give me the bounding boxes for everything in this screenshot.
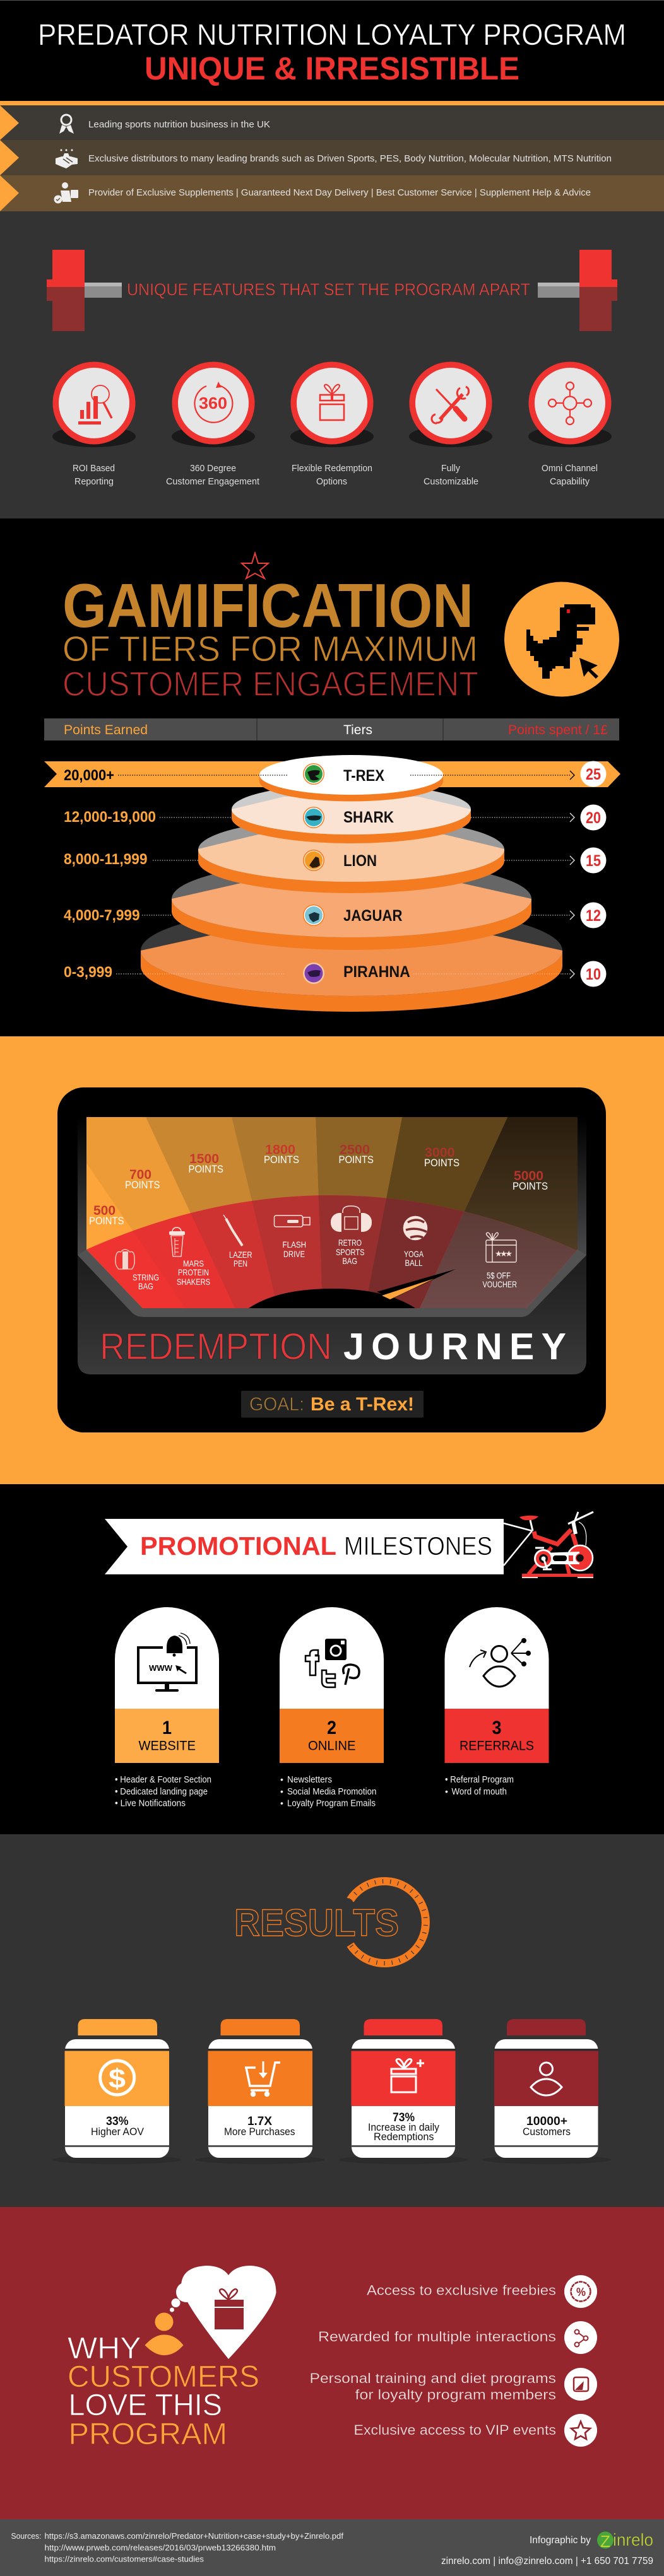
redemption: 5000 points voucher: ★★★ bbox=[495, 1249, 513, 1258]
credit and logo: zinrelo.com | info@zinrelo.com | +1 650 701 7759 bbox=[441, 2556, 653, 2567]
bottle: higher AOV bbox=[52, 2019, 181, 2164]
tier row: pirahna: PIRAHNA bbox=[343, 963, 410, 981]
redemption: 700 points shakers: SHAKERS bbox=[177, 1277, 210, 1287]
redemption: 3000 points yoga ball: POINTS bbox=[424, 1157, 459, 1169]
tier row: jaguar: JAGUAR bbox=[343, 907, 403, 925]
redemption: 5000 points voucher: 5$ OFF bbox=[487, 1270, 511, 1280]
credit and logo: inrelo bbox=[613, 2530, 653, 2550]
banner bbox=[105, 1519, 504, 1574]
text: exclusive supplements: Provider of Exclusive Supplements | Guaranteed Next Day Delivery | Best Customer Service | Supplement Help & Advice bbox=[88, 188, 591, 198]
redemption: 500 points string bag: 500 bbox=[93, 1203, 116, 1218]
redemption: 1800 points flash drive: DRIVE bbox=[283, 1249, 305, 1259]
tier row: t-rex bbox=[64, 761, 606, 787]
redemption: 700 points shakers bbox=[125, 1168, 210, 1287]
bottle: customers bbox=[482, 2019, 611, 2164]
title: PREDATOR NUTRITION LOYALTY PROGRAM bbox=[38, 18, 626, 51]
redemption: 500 points string bag: BAG bbox=[138, 1281, 153, 1291]
goal box: Be a T-Rex! bbox=[311, 1394, 414, 1415]
card: website bbox=[115, 1607, 219, 1809]
icon: gift plus bbox=[391, 2059, 424, 2092]
redemption: 3000 points yoga ball: YOGA bbox=[404, 1249, 424, 1259]
benefit: personal training: Personal training and diet programs bbox=[309, 2370, 556, 2386]
feature: fully customizable: Fully bbox=[441, 463, 460, 474]
redemption: 2500 points sports bag: RETRO bbox=[338, 1238, 362, 1248]
icon: dinosaur badge bbox=[504, 582, 619, 696]
panel: why customers love this program bbox=[0, 2207, 664, 2519]
panel: results bbox=[0, 1834, 664, 2207]
card: website: 1 bbox=[162, 1718, 172, 1738]
redemption: 3000 points yoga ball: 3000 bbox=[425, 1145, 454, 1160]
icon: heart with gift and person bbox=[145, 2266, 276, 2359]
tier row: jaguar bbox=[64, 902, 606, 928]
panel: gamification bbox=[44, 551, 620, 1012]
card: online bbox=[280, 1607, 384, 1809]
redemption: 700 points shakers: 700 bbox=[129, 1168, 151, 1182]
gauge bezel bbox=[78, 1117, 586, 1374]
feature: flexible redemption: Flexible Redemption bbox=[292, 463, 372, 474]
tier disk: shark bbox=[232, 791, 471, 843]
panel: promotional milestones bbox=[0, 1484, 664, 1834]
feature: fully customizable bbox=[409, 362, 492, 487]
card: online: Social Media Promotion bbox=[287, 1787, 376, 1797]
sources: Sources: bbox=[11, 2531, 42, 2541]
feature: ROI based reporting: Reporting bbox=[74, 476, 114, 487]
heading: why customers love this program: WHY bbox=[68, 2332, 141, 2365]
panel: header bbox=[0, 0, 664, 105]
redemption: 1800 points flash drive: POINTS bbox=[264, 1154, 299, 1166]
benefit: multiple interactions: Rewarded for multiple interactions bbox=[318, 2329, 556, 2345]
panel: redemption journey bbox=[0, 1036, 664, 1484]
benefit: exclusive freebies bbox=[367, 2275, 597, 2308]
tier row: t-rex: T-REX bbox=[343, 767, 384, 785]
redemption: 5000 points voucher: VOUCHER bbox=[482, 1279, 517, 1289]
benefit: VIP events bbox=[353, 2414, 597, 2447]
redemption: 2500 points sports bag bbox=[331, 1143, 374, 1266]
redemption: 1800 points flash drive: FLASH bbox=[283, 1239, 306, 1250]
tier row: lion: 8,000-11,999 bbox=[64, 851, 148, 868]
tier row: pirahna: 10 bbox=[586, 966, 601, 983]
heading: unique features: UNIQUE FEATURES THAT SET THE PROGRAM APART bbox=[127, 280, 530, 299]
sources: https://zinrelo.com/customers#case-studies bbox=[44, 2555, 204, 2563]
tier row: pirahna bbox=[64, 961, 606, 986]
bottle: higher AOV: 33% bbox=[106, 2115, 129, 2128]
tier disk: lion bbox=[198, 828, 504, 893]
feature: 360 degree engagement: 360 Degree bbox=[190, 463, 236, 474]
card: online: • bbox=[280, 1774, 283, 1784]
heading: results: RESULTS bbox=[234, 1902, 399, 1944]
tier row: jaguar: 12 bbox=[586, 907, 601, 925]
panel: footer bbox=[0, 2519, 664, 2576]
text: leading business: Leading sports nutrition business in the UK bbox=[88, 120, 270, 130]
card: website: WEBSITE bbox=[139, 1738, 196, 1753]
bottle: daily redemptions bbox=[339, 2019, 468, 2164]
icon: referral person bbox=[470, 1639, 530, 1687]
banner: MILESTONES bbox=[344, 1531, 492, 1560]
card: referrals: • Referral Program bbox=[445, 1775, 514, 1785]
feature: 360 degree engagement: Customer Engagement bbox=[166, 476, 260, 487]
bottle: daily redemptions: 73% bbox=[393, 2111, 415, 2124]
heading: customer engagement: CUSTOMER ENGAGEMENT bbox=[62, 664, 478, 703]
redemption: 3000 points yoga ball bbox=[403, 1145, 459, 1268]
benefit: exclusive freebies: % bbox=[576, 2286, 586, 2298]
bottle: more purchases: 1.7X bbox=[247, 2115, 272, 2128]
tier table header: Points Earned bbox=[64, 723, 148, 737]
icon: handshake bbox=[56, 149, 78, 168]
feature: flexible redemption: Options bbox=[316, 476, 347, 487]
sources bbox=[11, 2531, 343, 2563]
top tier banner bbox=[44, 761, 620, 787]
icon: ribbon bbox=[59, 114, 74, 134]
icon: exercise bike bbox=[504, 1512, 593, 1578]
panel: unique features bbox=[0, 211, 664, 518]
card: online: Newsletters bbox=[287, 1775, 332, 1785]
tier table header bbox=[44, 718, 619, 741]
feature: omni channel: Omni Channel bbox=[542, 463, 598, 474]
bottle: more purchases: More Purchases bbox=[224, 2126, 295, 2138]
heading: results bbox=[234, 1881, 425, 1964]
redemption: 2500 points sports bag: BAG bbox=[342, 1256, 357, 1266]
tier row: t-rex: 25 bbox=[586, 766, 601, 783]
feature: omni channel: Capability bbox=[550, 476, 590, 487]
redemption: 1800 points flash drive bbox=[264, 1143, 310, 1259]
text: exclusive distributors: Exclusive distributors to many leading brands such as Driven Sports, PES, Body Nutrition, Molecular Nutrition, MTS Nutrition bbox=[88, 154, 612, 164]
heading: redemption journey: REDEMPTION bbox=[100, 1326, 332, 1367]
dotted guide lines bbox=[116, 775, 571, 974]
benefit: exclusive freebies: Access to exclusive freebies bbox=[367, 2282, 556, 2298]
benefit: personal training: for loyalty program members bbox=[355, 2387, 556, 2403]
icon: shopping cart bbox=[245, 2061, 280, 2095]
gauge dial bbox=[86, 1117, 578, 1308]
heading: redemption journey: JOURNEY bbox=[343, 1326, 566, 1367]
heading: gamification: GAMIFICATION bbox=[62, 571, 473, 640]
icon: star bbox=[242, 553, 268, 578]
tier row: lion bbox=[64, 848, 606, 873]
feature: ROI based reporting: ROI Based bbox=[73, 463, 115, 474]
panel: company facts bbox=[0, 105, 664, 211]
icon: delivery person bbox=[54, 182, 78, 203]
card: online: • bbox=[280, 1786, 283, 1796]
bottle: customers: 10000+ bbox=[526, 2115, 567, 2128]
redemption: 5000 points voucher: POINTS bbox=[513, 1181, 548, 1192]
redemption: 2500 points sports bag: SPORTS bbox=[336, 1247, 365, 1257]
tier row: jaguar: 4,000-7,999 bbox=[64, 907, 140, 924]
redemption: 5000 points voucher bbox=[482, 1169, 548, 1289]
feature: 360 degree engagement bbox=[166, 362, 260, 487]
tier row: lion: 15 bbox=[586, 852, 601, 870]
redemption: 5000 points voucher: 5000 bbox=[514, 1169, 543, 1183]
bottle: more purchases bbox=[196, 2019, 324, 2164]
feature: flexible redemption bbox=[290, 362, 374, 487]
tier row: shark: SHARK bbox=[343, 809, 394, 826]
subtitle: UNIQUE & IRRESISTIBLE bbox=[145, 50, 519, 86]
card: website: • Live Notifications bbox=[115, 1799, 186, 1809]
redemption: 3000 points yoga ball: BALL bbox=[405, 1258, 423, 1268]
tier row: shark: 12,000-19,000 bbox=[64, 809, 156, 826]
heading: why customers love this program bbox=[68, 2332, 259, 2451]
card: online: ONLINE bbox=[308, 1738, 356, 1753]
icon: website notification: WWW bbox=[149, 1663, 173, 1673]
redemption: 500 points string bag: POINTS bbox=[89, 1215, 124, 1227]
card: online: • bbox=[280, 1798, 283, 1808]
redemption: 700 points shakers: PROTEIN bbox=[178, 1267, 209, 1277]
card: referrals: REFERRALS bbox=[459, 1738, 534, 1753]
icon: website notification bbox=[138, 1633, 196, 1692]
tier table header: Points spent / 1£ bbox=[508, 723, 608, 737]
barbell heading graphic bbox=[47, 250, 617, 331]
icon: customer bbox=[531, 2063, 562, 2095]
gauge needle bbox=[249, 1269, 456, 1308]
card: referrals: 3 bbox=[492, 1718, 501, 1738]
heading: why customers love this program: LOVE THIS bbox=[68, 2389, 222, 2422]
tier row: shark bbox=[64, 805, 606, 830]
tier table header: Tiers bbox=[343, 723, 372, 737]
card: online: Loyalty Program Emails bbox=[287, 1799, 376, 1809]
icon: dollar: $ bbox=[109, 2064, 126, 2094]
credit and logo: Z bbox=[600, 2532, 610, 2551]
goal box bbox=[241, 1391, 424, 1418]
tier row: lion: LION bbox=[343, 852, 377, 870]
credit and logo bbox=[441, 2530, 653, 2567]
redemption: 1500 points lazer pen: 1500 bbox=[189, 1152, 219, 1166]
heading: why customers love this program: PROGRAM bbox=[68, 2418, 227, 2451]
redemption: 1500 points lazer pen: POINTS bbox=[188, 1164, 223, 1175]
feature: ROI based reporting bbox=[52, 362, 136, 487]
card: website: • Dedicated landing page bbox=[115, 1787, 208, 1797]
credit and logo: Infographic by bbox=[530, 2535, 591, 2546]
tier row: pirahna: 0-3,999 bbox=[64, 964, 112, 981]
benefit: VIP events: Exclusive access to VIP events bbox=[353, 2422, 556, 2438]
redemption: 2500 points sports bag: POINTS bbox=[338, 1154, 374, 1166]
bottle: customers: Customers bbox=[523, 2126, 571, 2138]
bottle: daily redemptions: Redemptions bbox=[374, 2131, 434, 2143]
redemption: 700 points shakers: POINTS bbox=[125, 1180, 160, 1191]
benefit: multiple interactions bbox=[318, 2321, 597, 2354]
card: website: • Header & Footer Section bbox=[115, 1775, 211, 1785]
feature: 360 degree engagement: 360 bbox=[199, 394, 227, 413]
redemption: 500 points string bag bbox=[89, 1203, 159, 1291]
icon: social media bbox=[305, 1639, 359, 1687]
tier disk: pirahna bbox=[141, 923, 562, 1012]
heading: of tiers: OF TIERS FOR MAXIMUM bbox=[62, 629, 478, 669]
tier disk: t-rex bbox=[259, 755, 443, 801]
icon: dollar bbox=[100, 2061, 134, 2095]
bottle: daily redemptions: Increase in daily bbox=[368, 2121, 439, 2133]
feature: omni channel bbox=[528, 362, 612, 487]
feature: fully customizable: Customizable bbox=[424, 476, 478, 487]
card: referrals bbox=[444, 1607, 549, 1797]
banner: PROMOTIONAL bbox=[140, 1531, 336, 1560]
heading: redemption journey bbox=[100, 1326, 566, 1367]
goal box: GOAL: bbox=[249, 1394, 304, 1415]
sources: https://s3.amazonaws.com/zinrelo/Predator+Nutrition+case+study+by+Zinrelo.pdf bbox=[44, 2531, 343, 2541]
redemption: 1500 points lazer pen: PEN bbox=[234, 1258, 247, 1268]
sources: http://www.prweb.com/releases/2016/03/prweb13266380.htm bbox=[44, 2543, 276, 2552]
redemption: 2500 points sports bag: 2500 bbox=[340, 1143, 370, 1157]
card: online: 2 bbox=[327, 1718, 336, 1738]
bottle: higher AOV: Higher AOV bbox=[91, 2126, 145, 2138]
redemption: 500 points string bag: STRING bbox=[133, 1272, 159, 1282]
benefit: personal training bbox=[309, 2368, 597, 2403]
chevrons bbox=[570, 771, 574, 978]
card: referrals: Word of mouth bbox=[452, 1787, 507, 1797]
redemption: 1500 points lazer pen: LAZER bbox=[229, 1250, 252, 1260]
redemption: 1500 points lazer pen bbox=[188, 1152, 252, 1268]
heading: why customers love this program: CUSTOMERS bbox=[68, 2360, 259, 2394]
tier row: t-rex: 20,000+ bbox=[64, 767, 114, 784]
tier disk: jaguar bbox=[172, 874, 531, 950]
redemption: 1800 points flash drive: 1800 bbox=[265, 1143, 295, 1157]
card: referrals: • bbox=[445, 1786, 448, 1796]
redemption: 700 points shakers: MARS bbox=[183, 1258, 204, 1268]
tier row: shark: 20 bbox=[586, 809, 601, 827]
